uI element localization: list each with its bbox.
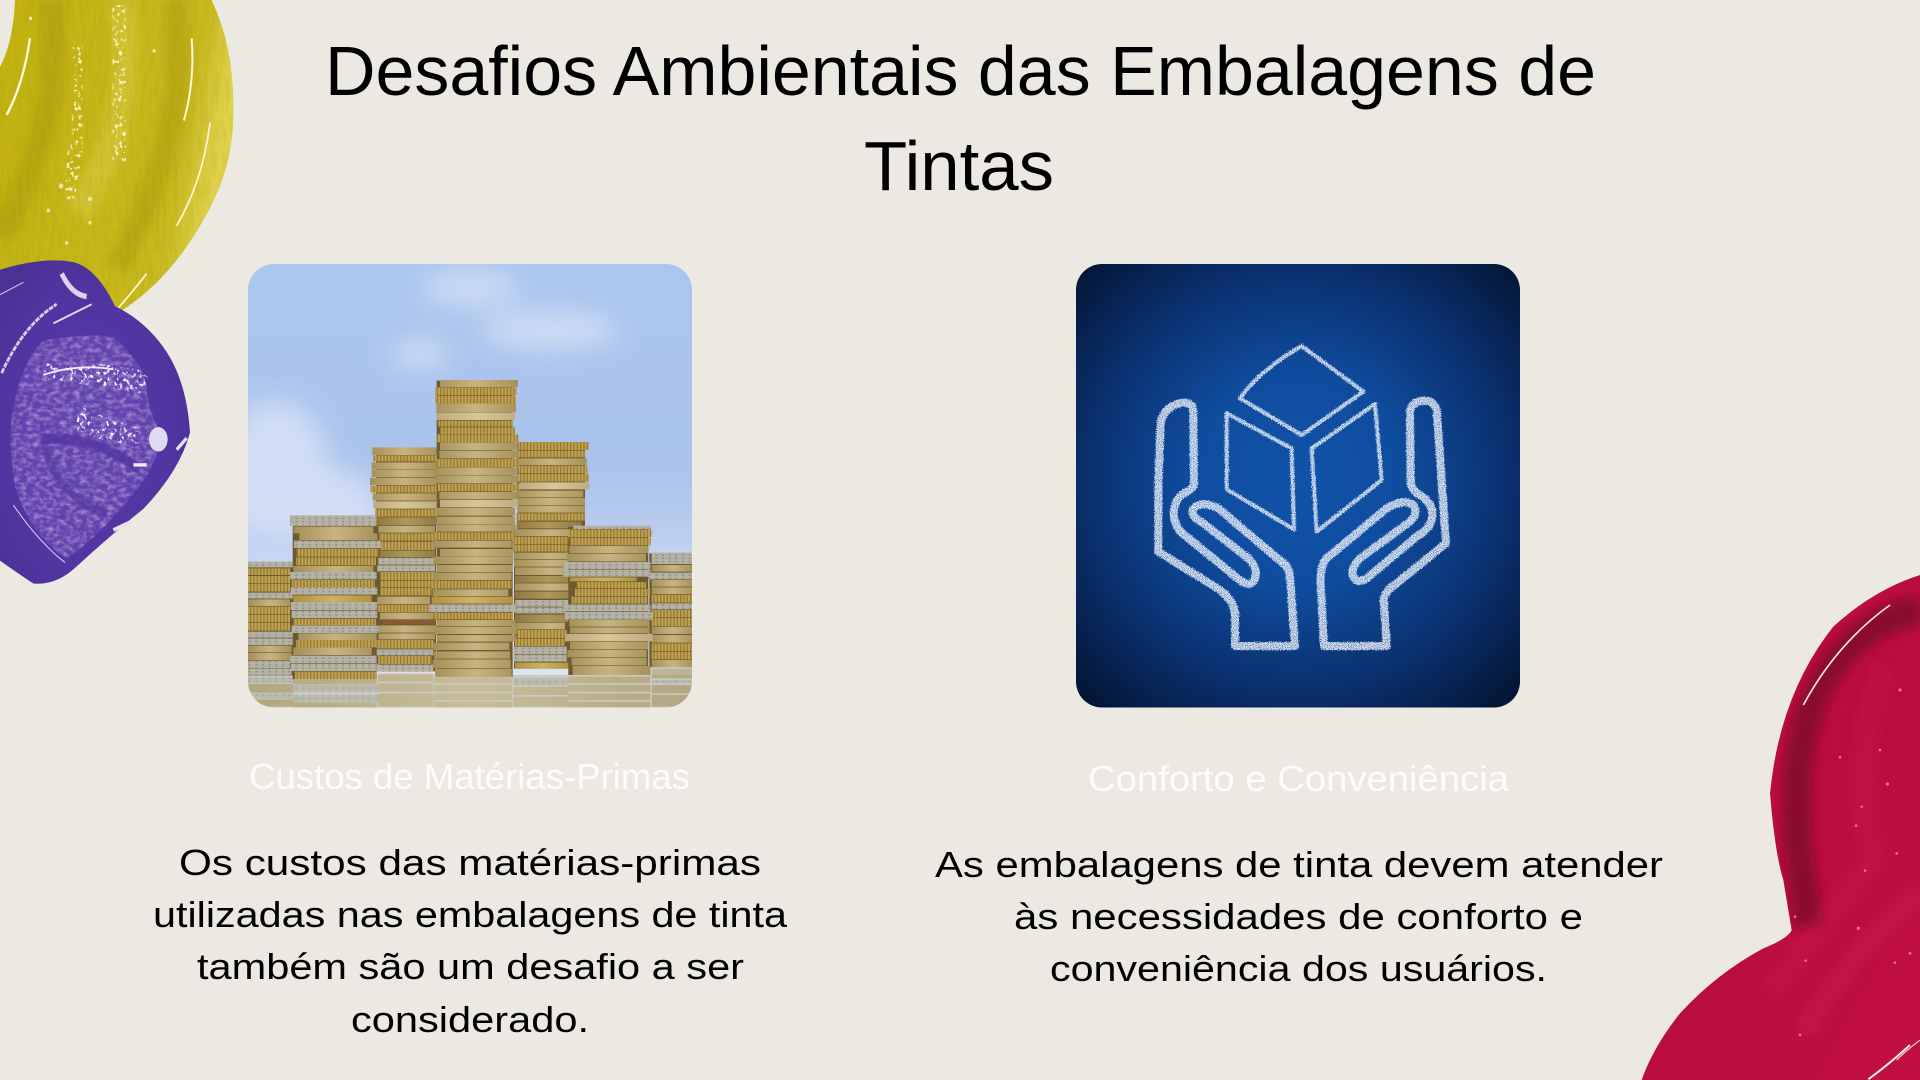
body text: raw material costs: considerado. bbox=[351, 999, 589, 1040]
title: Tintas bbox=[864, 127, 1054, 205]
body text: comfort and convenience: às necessidades de conforto e bbox=[1014, 896, 1583, 937]
photo: chalk hands holding a box bbox=[1076, 264, 1520, 708]
paint swatch: yellow bbox=[0, 0, 240, 314]
body text: comfort and convenience bbox=[935, 844, 1663, 989]
title bbox=[325, 32, 1596, 205]
icon: left hand bbox=[1158, 403, 1295, 646]
photo: coin stacks bbox=[220, 264, 700, 712]
body text: comfort and convenience: As embalagens de tinta devem atender bbox=[935, 844, 1663, 885]
stack C bbox=[370, 447, 439, 672]
stack B bbox=[290, 515, 381, 679]
stack F bbox=[563, 526, 653, 675]
stack G bbox=[648, 553, 693, 667]
icon: open box bbox=[1227, 346, 1382, 532]
body text: raw material costs bbox=[153, 842, 788, 1040]
body text: comfort and convenience: conveniência dos usuários. bbox=[1050, 948, 1547, 989]
icon: right hand bbox=[1321, 401, 1446, 646]
paint swatch: red bbox=[1642, 575, 1920, 1080]
body text: raw material costs: utilizadas nas embalagens de tinta bbox=[153, 894, 788, 935]
reflection bbox=[248, 668, 692, 708]
stack D bbox=[429, 380, 519, 677]
stack A bbox=[248, 562, 295, 676]
subheading: comfort and convenience: Conforto e Conveniência bbox=[1088, 758, 1510, 799]
subheading: raw material costs: Custos de Matérias-Primas bbox=[249, 756, 690, 797]
stack E bbox=[513, 442, 589, 669]
title: Desafios Ambientais das Embalagens de bbox=[325, 32, 1596, 110]
body text: raw material costs: também são um desafio a ser bbox=[197, 946, 744, 987]
paint swatch: purple bbox=[0, 260, 190, 584]
body text: raw material costs: Os custos das matérias-primas bbox=[179, 842, 761, 883]
